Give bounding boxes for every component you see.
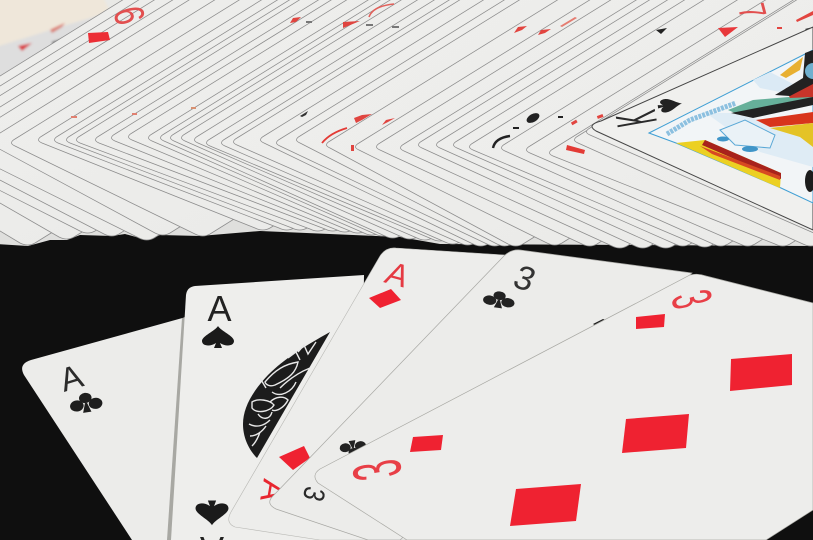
ace letter: A <box>207 288 232 329</box>
three numeral: 3 <box>508 259 541 299</box>
diamond suit bottom <box>279 446 310 470</box>
small diamond bottom <box>410 435 443 452</box>
ace letter: A <box>380 255 416 294</box>
large diamond middle <box>622 414 689 453</box>
king of spades card <box>592 27 813 230</box>
inverted three numeral: 3 <box>296 483 333 505</box>
card: three of diamonds <box>315 274 813 540</box>
small diamond top <box>636 314 665 329</box>
six of diamonds index <box>88 1 154 43</box>
small dark marks upper middle <box>300 21 399 117</box>
club suit <box>68 391 103 415</box>
large diamond right <box>730 354 792 391</box>
ace ornament <box>243 332 330 458</box>
spade suit bottom <box>196 501 228 525</box>
card: ace of spades <box>167 275 364 540</box>
fanned deck of cards <box>0 0 813 248</box>
blurred background at top <box>0 0 813 60</box>
inverted ace letter: A <box>253 477 294 505</box>
king index spade <box>657 97 683 113</box>
deck base filling the gaps along the bottom edge <box>0 150 813 246</box>
king portrait artwork <box>649 50 813 203</box>
three numeral top: 3 <box>659 284 723 315</box>
blurred far-left cards <box>0 0 200 130</box>
spade suit top <box>202 326 234 348</box>
large diamond bottom <box>510 484 581 526</box>
six of diamonds index: 6 <box>104 1 154 30</box>
king index letter: K <box>605 106 670 131</box>
inverted three numeral: 3 <box>339 454 417 486</box>
card: three of clubs <box>270 250 692 540</box>
red marks upper middle <box>71 4 395 151</box>
club suit bottom <box>339 439 367 458</box>
club suit top <box>482 289 516 310</box>
card: ace of clubs <box>22 317 186 540</box>
card index marks visible on the fan <box>71 0 813 154</box>
ace letter: A <box>55 357 87 399</box>
dark marks upper right <box>493 27 813 148</box>
diamond suit top <box>369 289 401 308</box>
red marks upper right <box>514 11 813 154</box>
card: ace of diamonds <box>229 248 505 540</box>
